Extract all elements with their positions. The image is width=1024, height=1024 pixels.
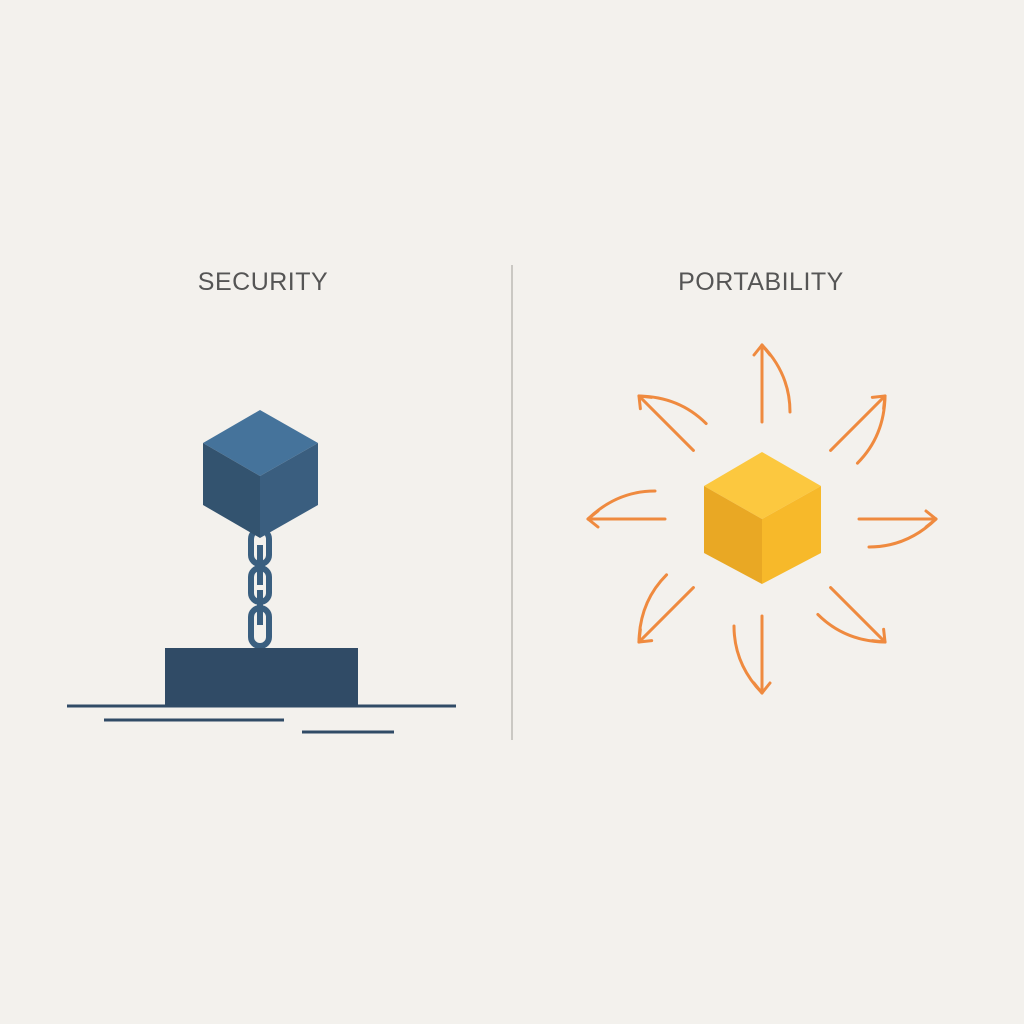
chain xyxy=(251,530,269,646)
divider xyxy=(511,265,513,740)
title: portability: PORTABILITY xyxy=(678,268,844,296)
icon: chained cube xyxy=(67,410,456,732)
icon: portable cube with arrows xyxy=(588,345,936,693)
ground lines xyxy=(67,704,456,708)
base block xyxy=(165,648,358,706)
yellow cube xyxy=(704,452,821,519)
blue cube xyxy=(203,410,318,476)
title: security: SECURITY xyxy=(198,268,328,296)
